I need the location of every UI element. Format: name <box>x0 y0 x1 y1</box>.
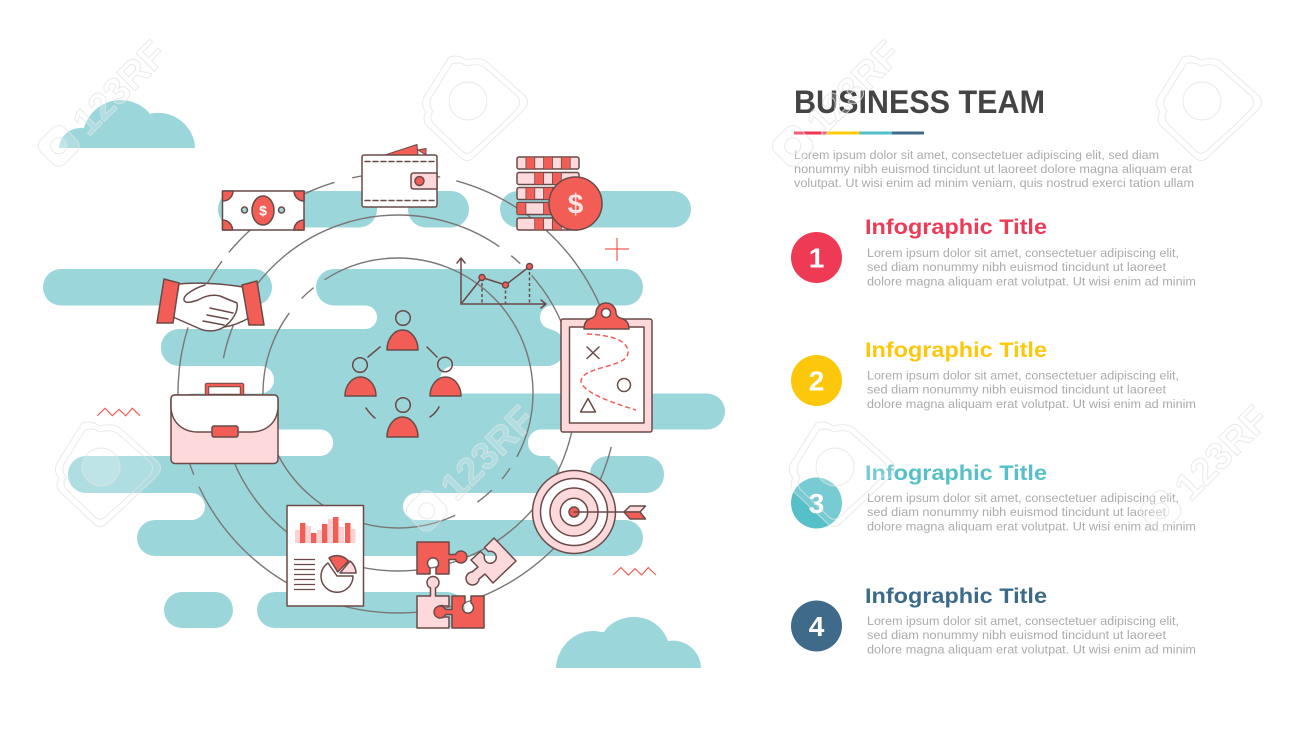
item 2 title: Infographic Title <box>865 338 1047 362</box>
decoration: zigzag left <box>97 408 140 416</box>
cloud top left <box>59 100 195 148</box>
watermark egg 2 <box>1156 56 1262 161</box>
list item 3 <box>791 461 1196 534</box>
puzzle piece bottom left <box>417 577 449 628</box>
number badge 4: 4 <box>809 611 825 642</box>
icon: banknote: $ <box>259 202 267 218</box>
icon: report document <box>287 506 364 606</box>
watermark logo 2 <box>768 33 909 175</box>
item 2 text: dolore magna aliquam erat volutpat. Ut wisi enim ad minim <box>867 397 1196 411</box>
watermark egg 3 <box>55 422 160 527</box>
number badge 1: 1 <box>809 242 824 274</box>
watermark logo 3: 123RF <box>433 398 543 509</box>
intro paragraph: volutpat. Ut wisi enim ad minim veniam, quis nostrud exerci tation ullam <box>794 176 1194 190</box>
item 3 text: dolore magna aliquam erat volutpat. Ut wisi enim ad minim <box>867 520 1196 534</box>
number badge 2: 2 <box>809 366 824 396</box>
watermark logo 4: 123RF <box>1167 398 1277 509</box>
concentric dashed rings <box>178 173 618 613</box>
person top <box>387 311 418 350</box>
list item 4 <box>791 584 1196 656</box>
intro paragraph: nonummy nibh euismod tincidunt ut laoreet dolore magna aliquam erat <box>794 162 1193 176</box>
watermark logo 3 <box>402 398 543 540</box>
icon: banknote <box>222 191 304 230</box>
item 1 text <box>867 246 1196 288</box>
item 4 title: Infographic Title <box>865 584 1047 608</box>
item 1 text: dolore magna aliquam erat volutpat. Ut wisi enim ad minim <box>867 274 1196 288</box>
item 1 title: Infographic Title <box>865 215 1047 239</box>
item 2 text <box>867 368 1196 411</box>
item 4 text: Lorem ipsum dolor sit amet, consectetuer adipiscing elit, <box>867 614 1179 628</box>
heading: business team: BUSINESS TEAM <box>794 84 1045 120</box>
icon: wallet <box>362 144 437 207</box>
list item 1 <box>791 215 1196 288</box>
bar chart on report <box>295 517 356 543</box>
watermark logo 2: 123RF <box>799 33 909 144</box>
puzzle piece bottom right <box>434 596 484 628</box>
item 2 text: sed diam nonummy nibh euismod tincidunt ut laoreet <box>867 382 1167 396</box>
heading underline <box>794 132 924 134</box>
decoration: plus sign <box>605 238 629 261</box>
icon: clipboard strategy <box>561 303 652 432</box>
intro paragraph: Lorem ipsum dolor sit amet, consectetuer adipiscing elit, sed diam <box>794 148 1159 162</box>
icon: briefcase <box>171 385 278 464</box>
item 1 text: sed diam nonummy nibh euismod tincidunt ut laoreet <box>867 260 1167 274</box>
item 3 text <box>867 491 1196 534</box>
item 3 text: sed diam nonummy nibh euismod tincidunt ut laoreet <box>867 505 1167 519</box>
list item 2 <box>791 338 1196 411</box>
number badge 4 <box>791 600 842 652</box>
text lines on report <box>294 560 315 590</box>
intro paragraph <box>794 148 1194 190</box>
icon: line chart <box>457 258 546 308</box>
watermark logo 4 <box>1136 398 1277 540</box>
icon: handshake <box>157 279 264 331</box>
puzzle piece top left <box>417 542 467 574</box>
person bottom <box>387 398 418 437</box>
icon: coin stack <box>517 157 602 230</box>
item 2 text: Lorem ipsum dolor sit amet, consectetuer adipiscing elit, <box>867 368 1179 382</box>
icon: puzzle pieces <box>417 538 516 628</box>
icon: team of four people <box>345 311 461 437</box>
cloud bottom right <box>556 617 701 668</box>
watermark egg 4 <box>789 422 894 527</box>
number badge 3 <box>791 478 842 528</box>
item 4 text <box>867 614 1196 656</box>
item 3 text: Lorem ipsum dolor sit amet, consectetuer adipiscing elit, <box>867 491 1179 505</box>
watermark overlay <box>34 33 1277 540</box>
person left <box>345 358 376 396</box>
pie chart on report <box>321 556 356 592</box>
watermark logo 1 <box>34 33 175 175</box>
watermark egg 1 <box>422 56 528 161</box>
connector dashes <box>366 347 439 418</box>
icon: coin stack: $ <box>568 188 584 220</box>
watermark logo 1: 123RF <box>65 33 175 144</box>
teal rounded background bands <box>43 191 725 628</box>
icon: target with arrow <box>532 470 646 554</box>
number badge 2 <box>791 355 842 406</box>
item 3 title: Infographic Title <box>865 461 1047 485</box>
puzzle piece top right <box>466 538 516 585</box>
decoration: zigzag right <box>613 568 656 575</box>
item 1 text: Lorem ipsum dolor sit amet, consectetuer adipiscing elit, <box>867 246 1179 260</box>
person right <box>430 357 461 396</box>
item 4 text: sed diam nonummy nibh euismod tincidunt ut laoreet <box>867 628 1167 642</box>
item 4 text: dolore magna aliquam erat volutpat. Ut wisi enim ad minim <box>867 642 1196 656</box>
number badge 1 <box>791 232 842 283</box>
number badge 3: 3 <box>809 488 824 519</box>
